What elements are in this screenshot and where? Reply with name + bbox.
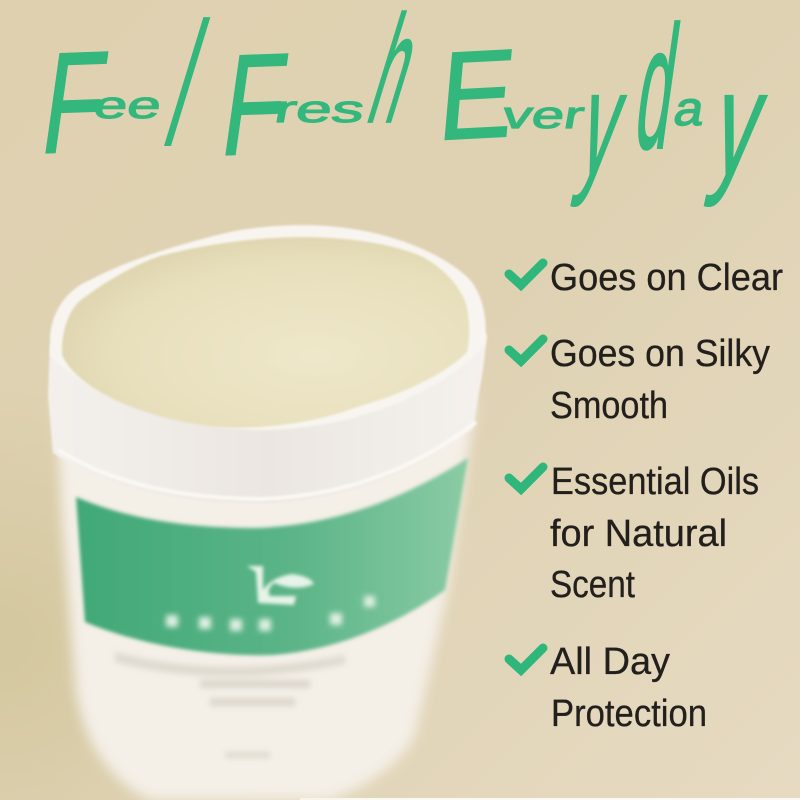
icon: check (509, 648, 543, 670)
icon: check (509, 339, 543, 361)
title: Feel Fresh Everyday (34, 0, 779, 208)
title word: Fresh (214, 0, 436, 186)
benefit: Goes on Silky Smooth: Goes on Silky (550, 333, 770, 375)
benefit: Essential Oils for Natural Scent: Scent (550, 564, 635, 606)
label wordmark, blurred (166, 596, 375, 631)
icon: check (509, 263, 543, 285)
benefit: Essential Oils for Natural Scent: for Natural (550, 513, 727, 555)
benefit: All Day Protection: All Day (550, 641, 670, 683)
benefit: Goes on Clear: Goes on Clear (550, 257, 783, 299)
benefit: All Day Protection: Protection (551, 693, 707, 735)
title word: Everyday: y (701, 41, 779, 208)
benefit: Essential Oils for Natural Scent (509, 461, 759, 606)
balm surface (62, 237, 469, 428)
rim (50, 225, 486, 430)
benefit: Goes on Silky Smooth (509, 333, 770, 427)
benefit: Essential Oils for Natural Scent: Essential Oils (551, 461, 759, 503)
title word: Fresh: res (271, 88, 368, 131)
title word: Everyday: ver (500, 94, 588, 136)
product: deodorant jar (48, 225, 487, 800)
title word: Everyday (434, 0, 779, 208)
icon: check (509, 467, 543, 489)
jar body (56, 400, 476, 800)
label logo (247, 566, 314, 605)
title word: Feel: ee (91, 83, 165, 126)
label band (76, 458, 468, 655)
title word: Feel (34, 0, 223, 184)
title word: Fresh: F (214, 24, 296, 186)
title word: Feel: F (34, 22, 116, 184)
benefit: Goes on Silky Smooth: Smooth (550, 385, 668, 427)
title word: Everyday: a (670, 81, 710, 135)
title word: Everyday: E (434, 23, 520, 167)
title word: Everyday: y (568, 40, 639, 208)
benefit: All Day Protection (509, 641, 707, 735)
lid collar (48, 270, 487, 503)
blurred ingredient copy (115, 652, 345, 758)
